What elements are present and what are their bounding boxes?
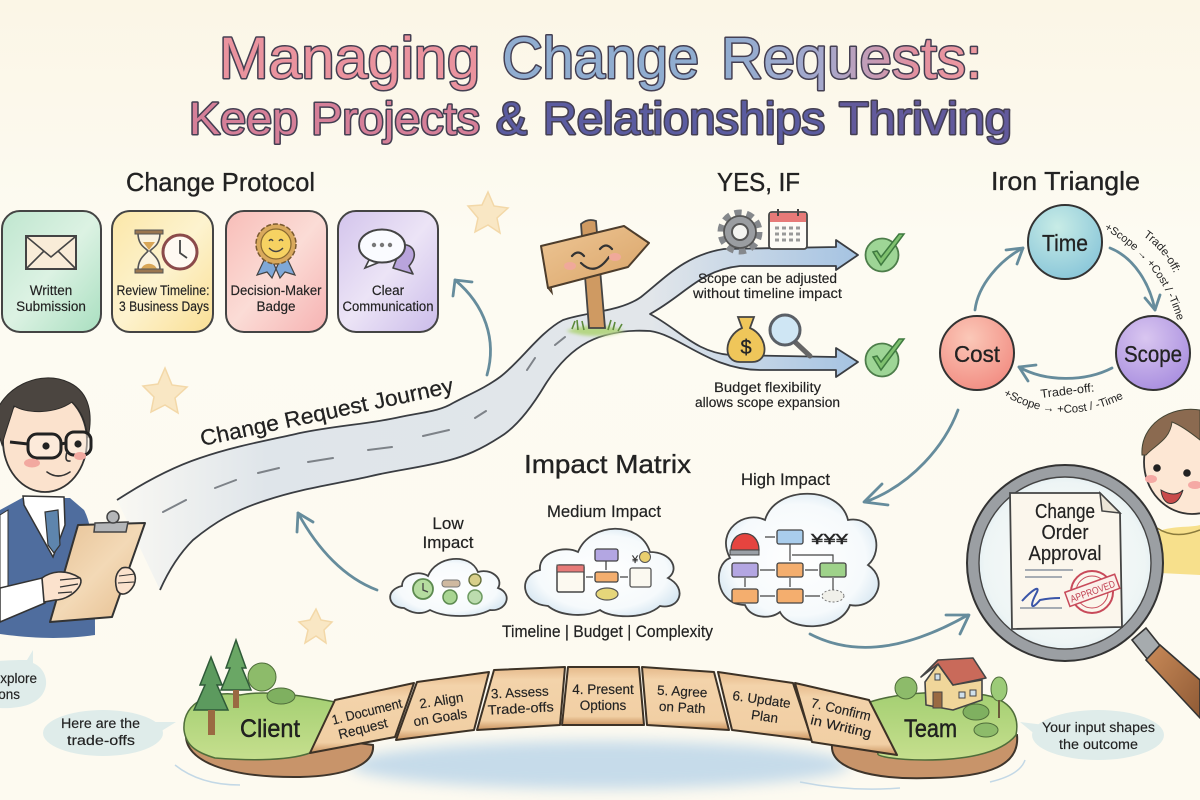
cloud: high: ¥¥¥ — [810, 531, 849, 548]
heading: impact matrix: Impact Matrix — [524, 449, 691, 479]
title: Relationships — [543, 93, 825, 144]
step 3 — [477, 667, 565, 730]
document: Approval — [1028, 542, 1102, 565]
card: written submission: Written — [30, 283, 72, 298]
arrow: cost to time — [975, 248, 1023, 310]
cloud: medium: ¥ — [631, 554, 639, 566]
step 3: 3. Assess — [491, 683, 549, 702]
trade-off label: bottom: Trade-off: — [1040, 381, 1095, 401]
icon: gear — [721, 213, 759, 251]
step 7 — [795, 683, 897, 755]
magnifying glass: change order approval — [967, 465, 1200, 718]
high impact — [719, 470, 879, 626]
step 5: 5. Agree — [657, 683, 708, 700]
heading: change protocol: Change Protocol — [126, 167, 315, 197]
document — [1010, 493, 1122, 629]
star — [299, 609, 332, 643]
step 7: in Writing — [809, 712, 873, 741]
icon: house — [895, 658, 1007, 737]
panel: impact matrix — [390, 449, 879, 641]
text: budget condition: allows scope expansion — [695, 395, 840, 410]
document: Order — [1042, 521, 1089, 544]
bubble: your input shapes the outcome: the outcome — [1059, 737, 1138, 752]
step 7: 7. Confirm — [810, 695, 872, 724]
card: clear communication — [338, 211, 438, 332]
card: clear communication: Clear — [372, 283, 405, 298]
icon: magnifier — [770, 315, 810, 356]
step 2: on Goals — [412, 706, 468, 729]
card: decision-maker badge: Decision-Maker — [230, 283, 322, 298]
icon: money bag: $ — [740, 337, 752, 359]
bridge: seven steps — [310, 667, 897, 755]
star — [468, 192, 508, 233]
island: team: Team — [904, 715, 957, 743]
node: cost — [940, 316, 1014, 390]
node: time: Time — [1042, 230, 1088, 256]
bubble: explore options — [0, 650, 46, 708]
title: Keep Projects — [189, 93, 480, 144]
card: decision-maker badge — [226, 211, 327, 332]
icon: check — [866, 234, 904, 272]
icon: hourglass and clock — [135, 230, 197, 273]
step 6 — [718, 672, 812, 740]
label: change request journey: Change Request Journey — [198, 373, 455, 451]
arrow: iron triangle to high impact — [864, 410, 958, 505]
step 4: 4. Present — [572, 682, 634, 697]
step 1 — [310, 683, 414, 753]
title: Change — [502, 26, 699, 91]
medium impact — [525, 502, 680, 616]
character: client — [1142, 409, 1200, 575]
arrow: high impact to approval — [810, 615, 969, 647]
card: written submission — [2, 211, 101, 332]
card: review timeline — [112, 211, 213, 332]
icon: check — [866, 339, 904, 376]
step 2: 2. Align — [418, 690, 464, 711]
node: time — [1028, 205, 1102, 279]
island: client: Client — [240, 715, 300, 743]
text: budget condition: Budget flexibility — [714, 380, 821, 395]
title: Thriving — [839, 93, 1012, 144]
stamp: approved: APPROVED — [1069, 579, 1117, 605]
arrow: scope to cost — [1019, 365, 1112, 381]
step 1: 1. Document — [330, 696, 404, 728]
step 5: on Path — [659, 699, 706, 716]
star — [143, 368, 187, 413]
panel: iron triangle — [939, 166, 1191, 413]
trade-off label: top: Trade-off: — [1145, 230, 1180, 272]
trade-off label: bottom: +Scope → +Cost / -Time — [1005, 390, 1122, 413]
character: project manager — [0, 378, 145, 638]
low impact — [390, 514, 507, 616]
heading: yes, if: YES, IF — [717, 167, 800, 197]
panel: yes, if — [692, 167, 904, 410]
step 4 — [562, 667, 644, 725]
text: budget condition — [695, 380, 840, 410]
title — [189, 26, 1012, 144]
card: review timeline: Review Timeline: — [116, 283, 210, 298]
medium impact: Medium Impact — [547, 502, 661, 521]
text: scope condition: Scope can be adjusted — [698, 271, 837, 286]
low impact: Impact — [422, 533, 474, 552]
arrow: time to scope — [1110, 248, 1160, 310]
handle — [1132, 628, 1200, 718]
bubble: here are the trade-offs: Here are the — [61, 716, 140, 731]
icon: money bag — [727, 317, 765, 362]
card: written submission: Submission — [16, 299, 86, 314]
step 3: Trade-offs — [487, 699, 554, 718]
text: scope condition — [692, 271, 842, 301]
arrow: low impact to road — [297, 513, 377, 590]
bubble: here are the trade-offs: trade-offs — [67, 733, 135, 748]
bubble: your input shapes the outcome: Your input shapes — [1042, 720, 1155, 735]
title: & — [496, 93, 527, 144]
step 1: Request — [337, 715, 389, 742]
icon: envelope — [26, 236, 76, 269]
node: cost: Cost — [954, 341, 1001, 367]
icon: trees — [194, 640, 295, 735]
heading: iron triangle: Iron Triangle — [991, 166, 1140, 196]
signpost — [541, 220, 649, 336]
panel: change protocol — [2, 167, 438, 332]
water — [175, 741, 1025, 789]
caption: timeline budget complexity: Timeline | Budget | Complexity — [502, 622, 713, 641]
icon: alarm — [730, 534, 759, 555]
cloud: high — [719, 494, 879, 626]
island: client — [184, 640, 373, 777]
title: Managing — [219, 26, 480, 91]
clipboard — [42, 511, 145, 622]
card: review timeline: 3 Business Days — [119, 299, 209, 314]
island: team — [832, 658, 1017, 778]
step 6: 6. Update — [732, 688, 792, 711]
step 2 — [396, 672, 489, 740]
cloud: low — [390, 559, 507, 616]
node: scope — [1116, 316, 1190, 390]
icon: chat bubbles — [359, 230, 414, 274]
high impact: High Impact — [741, 470, 830, 489]
vest — [0, 498, 95, 638]
title: Requests: — [721, 26, 982, 91]
step 4: Options — [580, 698, 627, 713]
card: clear communication: Communication — [342, 299, 434, 314]
text: scope condition: without timeline impact — [692, 286, 842, 301]
road: change request journey — [117, 240, 858, 590]
node: scope: Scope — [1124, 341, 1182, 367]
icon: calendar — [769, 209, 807, 249]
bubble: here are the trade-offs — [43, 710, 176, 756]
card: decision-maker badge: Badge — [256, 299, 296, 314]
low impact: Low — [432, 514, 464, 533]
cloud: medium — [525, 529, 680, 616]
bubble: your input shapes the outcome — [1020, 710, 1164, 760]
trade-off label: top: +Scope → +Cost / -Time — [1106, 225, 1182, 320]
document: Change — [1035, 500, 1095, 523]
step 6: Plan — [750, 707, 779, 726]
head — [0, 378, 91, 492]
step 5 — [642, 667, 729, 730]
arrow: road to protocol — [453, 280, 490, 375]
icon: smiling rosette badge — [256, 224, 296, 278]
